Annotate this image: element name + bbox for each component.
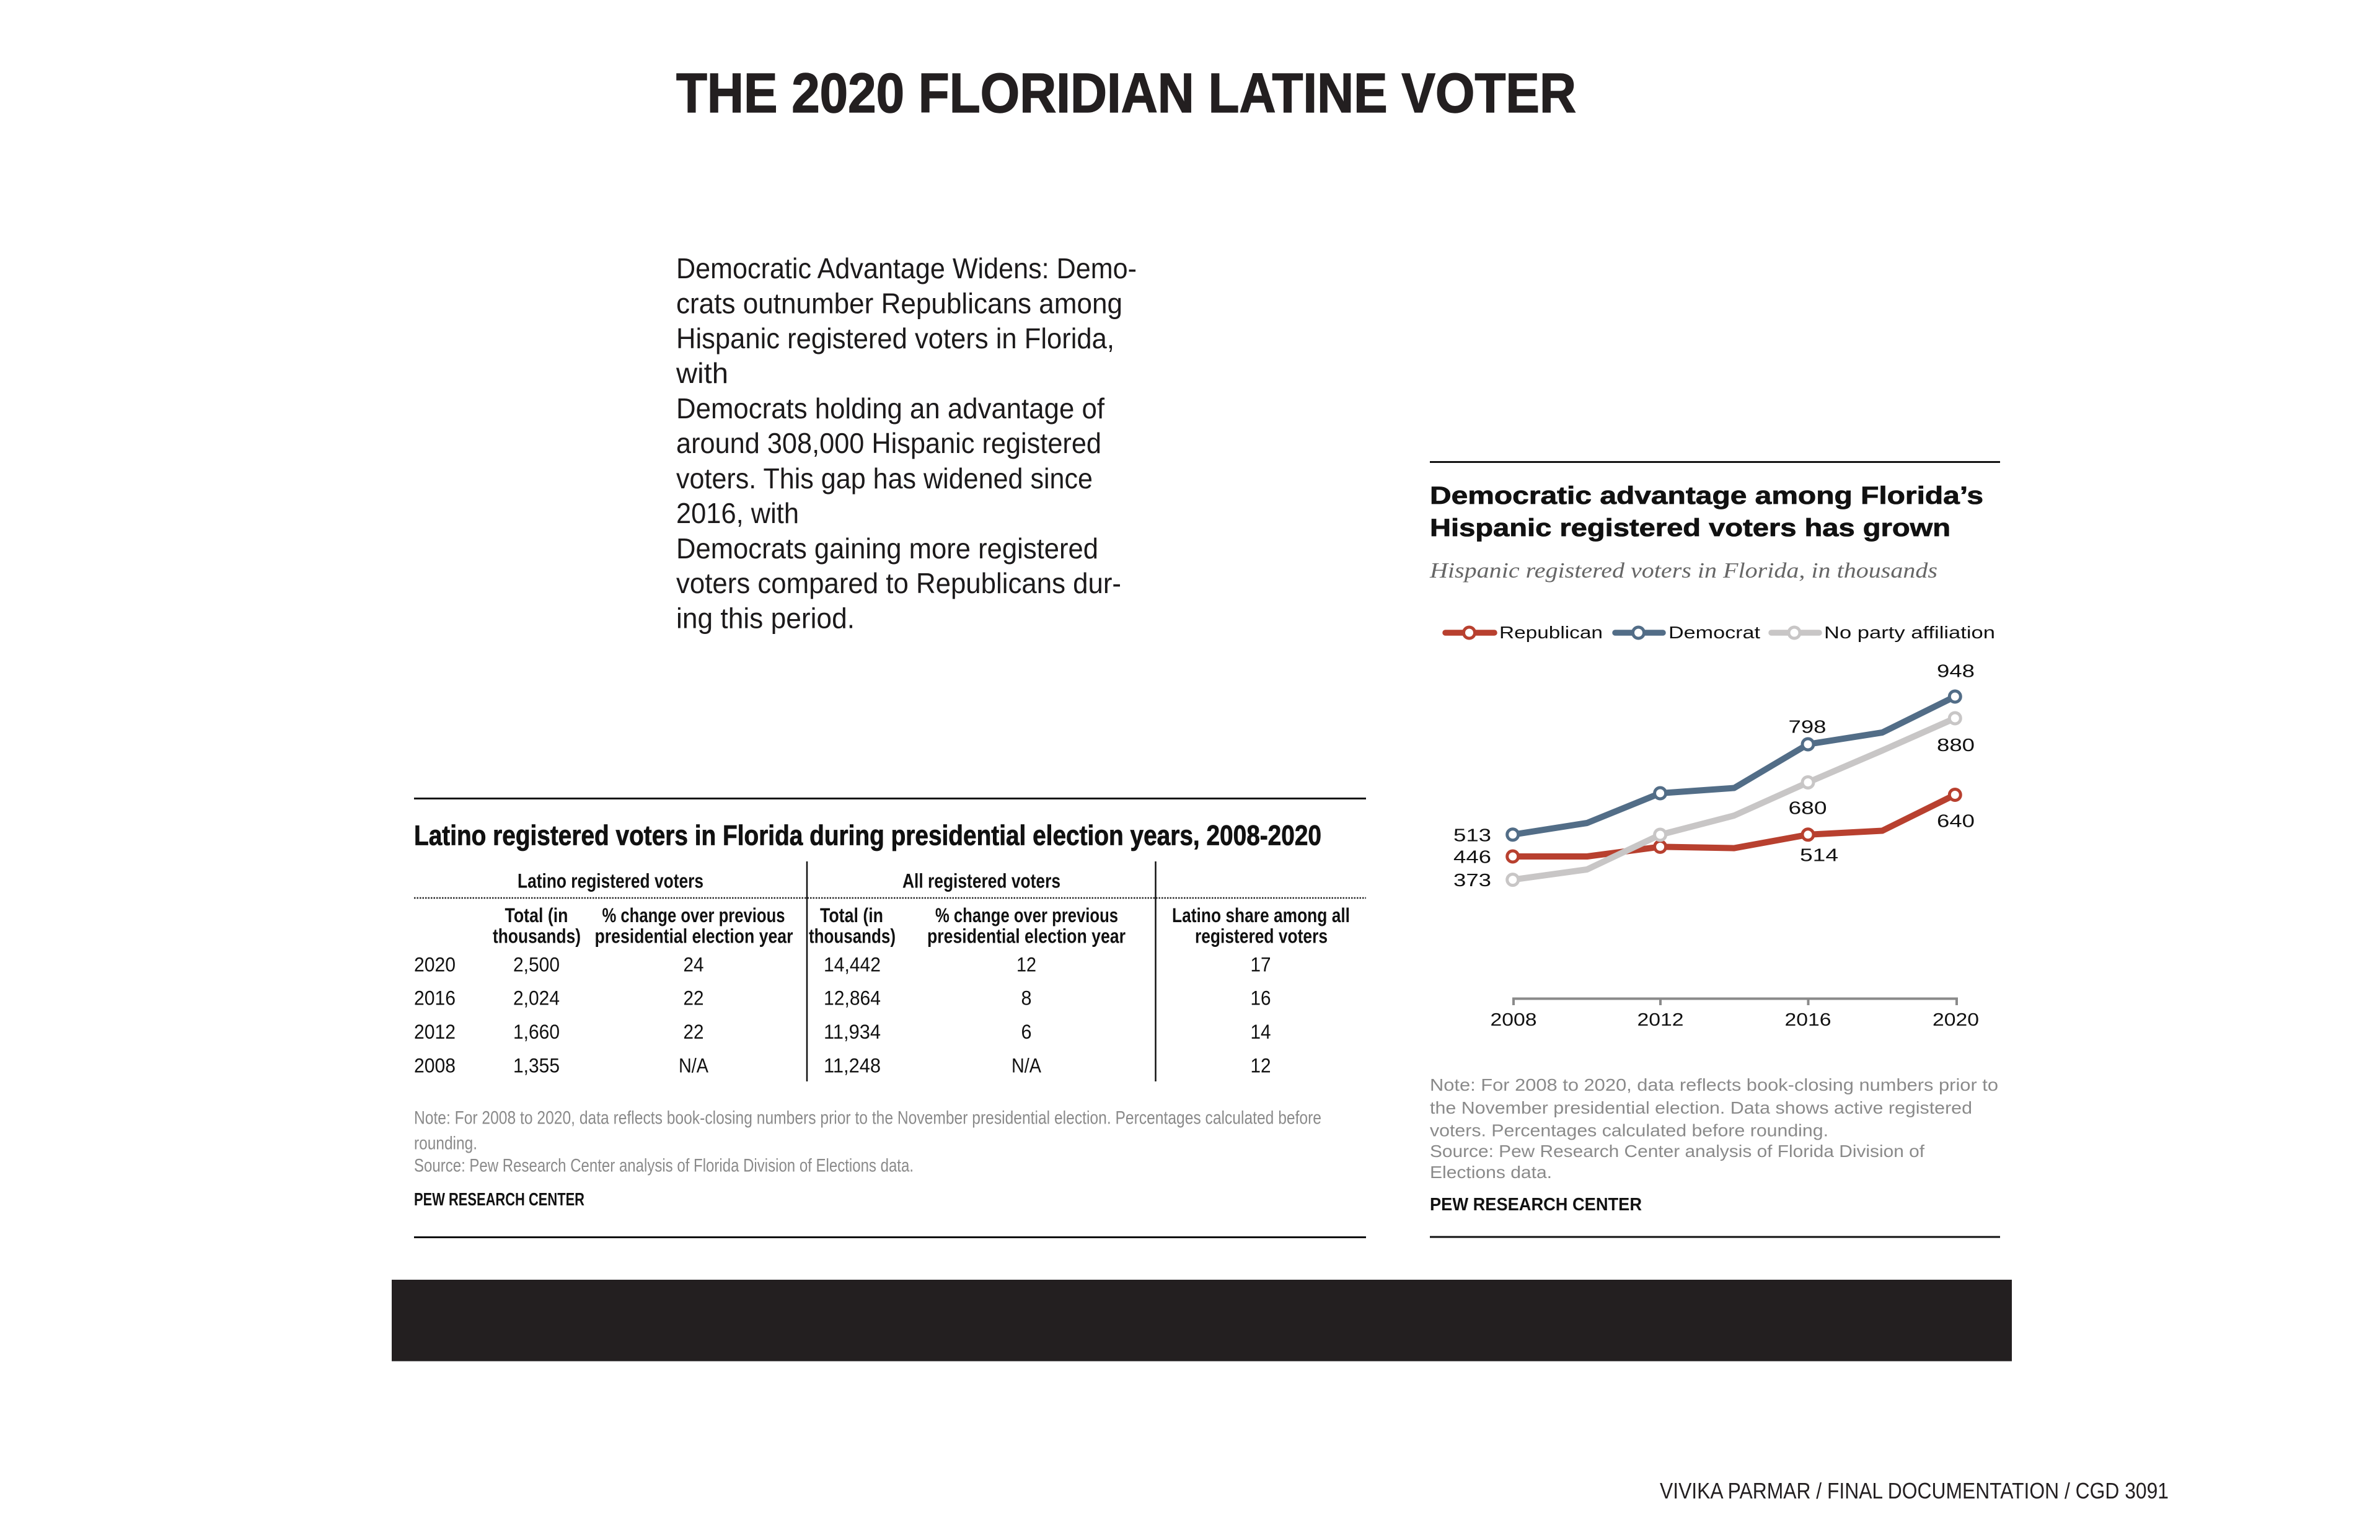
table row: 2012: 6: [1021, 1021, 1031, 1043]
table column headers: Total (in: [820, 904, 883, 926]
text block: democratic advantage widens: Hispanic registered voters in Florida,: [676, 322, 1114, 354]
panel: democratic advantage line chart: [1429, 461, 2000, 1238]
text block: democratic advantage widens: Democratic Advantage Widens: Demo-: [676, 252, 1137, 284]
data labels: 640: [1937, 812, 1975, 832]
table note and source: Note: For 2008 to 2020, data reflects book-closing numbers prior to the November presidential election. Percentages calculated before: [414, 1108, 1321, 1128]
data labels: 513: [1453, 825, 1491, 845]
chart legend: No party affiliation: [1824, 623, 1995, 642]
chart note and source: [1430, 1075, 1998, 1182]
table row: 2016: 8: [1021, 987, 1031, 1010]
series line: no party affiliation: [1507, 713, 1960, 886]
table column headers: Latino share among all: [1172, 904, 1350, 926]
table column headers: presidential election year: [595, 925, 793, 947]
table row: 2020: 2,500: [513, 953, 560, 975]
table column headers: % change over previous: [602, 904, 785, 926]
chart note and source: voters. Percentages calculated before rounding.: [1430, 1120, 1828, 1140]
table row: 2020: 14,442: [824, 953, 881, 975]
table row: 2016: 2016: [414, 987, 456, 1010]
text block: democratic advantage widens: 2016, with: [676, 497, 799, 529]
data labels: 880: [1937, 736, 1975, 755]
text block: democratic advantage widens: [676, 252, 1137, 635]
table row: 2012: [414, 1021, 1271, 1043]
table column headers: Total (in: [505, 904, 568, 926]
chart note and source: the November presidential election. Data shows active registered: [1430, 1098, 1972, 1117]
text block: democratic advantage widens: voters. This gap has widened since: [676, 462, 1093, 495]
table column headers: [493, 870, 1350, 947]
table column headers: presidential election year: [927, 925, 1126, 947]
table row: 2008: 12: [1251, 1055, 1271, 1077]
chart legend: [1445, 623, 1995, 642]
x axis: [1490, 999, 1979, 1030]
text block: democratic advantage widens: voters compared to Republicans dur-: [676, 567, 1121, 599]
table heading: Latino registered voters in Florida during presidential election years, 2008-2020: [414, 819, 1321, 851]
table row: 2020: 2020: [414, 953, 456, 975]
series line: republican: [1507, 790, 1960, 862]
black footer bar: [392, 1280, 2012, 1361]
table row: 2012: 1,660: [513, 1021, 560, 1043]
table row: 2016: 2,024: [513, 987, 560, 1010]
data labels: [1453, 662, 1975, 891]
chart note and source: Source: Pew Research Center analysis of Florida Division of: [1430, 1142, 1924, 1161]
text block: democratic advantage widens: Democrats holding an advantage of: [676, 392, 1104, 425]
text block: democratic advantage widens: ing this period.: [676, 602, 855, 635]
x axis: 2020: [1933, 1010, 1979, 1030]
chart credit: PEW RESEARCH CENTER: [1430, 1195, 1642, 1215]
data labels: 680: [1789, 798, 1827, 818]
table row: 2020: [414, 953, 1271, 975]
table row: 2012: 11,934: [824, 1021, 881, 1043]
x axis: 2012: [1637, 1010, 1683, 1030]
table row: 2008: 11,248: [824, 1055, 881, 1077]
chart note and source: Note: For 2008 to 2020, data reflects book-closing numbers prior to: [1430, 1075, 1998, 1094]
table row: 2020: 12: [1016, 953, 1036, 975]
x axis: 2008: [1490, 1010, 1537, 1030]
series line: democrat: [1507, 691, 1960, 840]
table column headers: thousands): [493, 925, 581, 947]
table row: 2016: 16: [1251, 987, 1271, 1010]
table row: 2008: 2008: [414, 1055, 456, 1077]
chart heading: Hispanic registered voters has grown: [1430, 514, 1950, 542]
data labels: 446: [1453, 848, 1491, 868]
data labels: 798: [1789, 718, 1826, 737]
data labels: 373: [1453, 871, 1491, 891]
table row: 2012: 14: [1251, 1021, 1271, 1043]
table note and source: [414, 1108, 1321, 1176]
table row: 2008: 1,355: [513, 1055, 560, 1077]
chart note and source: Elections data.: [1430, 1163, 1552, 1182]
table column headers: registered voters: [1195, 925, 1328, 947]
table row: 2016: 12,864: [824, 987, 881, 1010]
title: THE 2020 FLORIDIAN LATINE VOTER: [676, 63, 1576, 125]
table column headers: thousands): [809, 925, 896, 947]
text block: democratic advantage widens: Democrats gaining more registered: [676, 532, 1098, 565]
table row: 2012: 22: [683, 1021, 704, 1043]
chart legend: Republican: [1499, 623, 1603, 642]
text block: democratic advantage widens: crats outnumber Republicans among: [676, 288, 1122, 320]
chart heading: Democratic advantage among Florida’s: [1430, 482, 1983, 509]
table row: 2012: 2012: [414, 1021, 456, 1043]
chart subtitle: Hispanic registered voters in Florida, in thousands: [1429, 558, 1937, 583]
table row: 2016: 22: [683, 987, 704, 1010]
table row: 2008: N/A: [679, 1055, 709, 1077]
table row: 2016: [414, 987, 1271, 1010]
data labels: 948: [1937, 662, 1975, 682]
table column headers: Latino registered voters: [518, 870, 703, 892]
table row: 2008: [414, 1055, 1271, 1077]
table row: 2020: 24: [683, 953, 704, 975]
table row: 2020: 17: [1251, 953, 1271, 975]
table credit: PEW RESEARCH CENTER: [414, 1190, 584, 1210]
table note and source: rounding.: [414, 1133, 477, 1154]
x axis: 2016: [1785, 1010, 1831, 1030]
table note and source: Source: Pew Research Center analysis of Florida Division of Elections data.: [414, 1155, 914, 1176]
footer credit: VIVIKA PARMAR / FINAL DOCUMENTATION / CGD 3091: [1660, 1478, 2169, 1503]
chart legend: Democrat: [1668, 623, 1760, 642]
table row: 2008: N/A: [1011, 1055, 1042, 1077]
text block: democratic advantage widens: around 308,000 Hispanic registered: [676, 427, 1101, 459]
data labels: 514: [1800, 845, 1838, 865]
table column headers: All registered voters: [902, 870, 1060, 892]
panel: registered voters table: [414, 798, 1366, 1238]
text block: democratic advantage widens: with: [676, 357, 728, 389]
chart heading: [1430, 482, 1983, 542]
table column headers: % change over previous: [935, 904, 1118, 926]
